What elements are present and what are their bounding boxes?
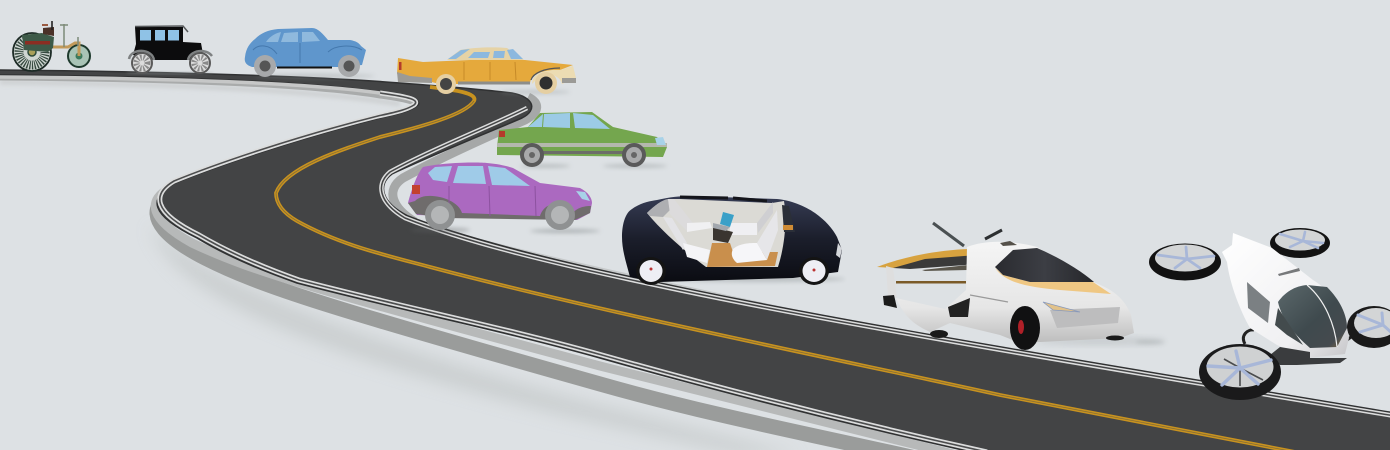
windows: [140, 30, 151, 40]
wheels: [254, 55, 276, 77]
cabin and body: [133, 27, 203, 60]
table: [713, 227, 733, 243]
shadow: [530, 229, 600, 233]
wheels: [436, 74, 456, 94]
car: 1880s motorwagen: [13, 21, 90, 71]
soft stripe on the far upper strip: [0, 77, 380, 93]
front light: [836, 243, 842, 258]
details: [412, 185, 420, 194]
chin: [1270, 347, 1347, 365]
rotor: right: [1347, 306, 1390, 348]
vehicle: passenger drone: [1135, 228, 1390, 400]
dark body shell: [622, 196, 842, 282]
wheels: [520, 143, 544, 167]
windows: [448, 49, 470, 59]
wing: [877, 249, 969, 268]
fenders: [129, 51, 154, 60]
car: green 1980s sedan: [497, 112, 667, 168]
arm struts: [1243, 330, 1358, 375]
cabin: [447, 47, 524, 60]
wheels: [425, 200, 455, 230]
orange stripe: [995, 268, 1111, 294]
car: blue 1940s sedan: [245, 28, 375, 78]
shadow: [255, 74, 375, 78]
windshield: [995, 248, 1094, 282]
cockpit frame: [1307, 285, 1337, 347]
headlight: [1043, 302, 1080, 312]
door jamb: [647, 199, 670, 217]
tail fin: [886, 266, 897, 298]
wooden floor: [707, 243, 778, 267]
shadow: [1035, 338, 1165, 344]
curb: light ledge along far side: [420, 224, 1390, 416]
door lines: [253, 43, 362, 63]
car: autonomous open-interior vehicle: [622, 196, 845, 285]
shadow: [126, 72, 214, 74]
shadow: [1135, 340, 1165, 344]
curb: inner right side: [393, 97, 537, 222]
yellow centre line: [276, 87, 1295, 450]
rotor blades: [933, 223, 964, 246]
curb: lower edge, dark side: [157, 160, 960, 450]
wheels: [1010, 306, 1040, 350]
frame: [50, 43, 79, 56]
wheels: [636, 257, 666, 285]
side vent: [948, 298, 970, 317]
car: purple hatchback: [408, 162, 600, 233]
cockpit glass: [1278, 285, 1347, 348]
laptop: [720, 212, 734, 227]
white edge line: inner double stripe: [381, 108, 1390, 416]
seat and tiller: [43, 27, 54, 36]
car: black vintage sedan: [126, 26, 214, 74]
windows: [266, 32, 281, 42]
roof rails: [680, 197, 767, 201]
shadow: [500, 90, 570, 94]
shadow: [675, 276, 845, 282]
windows: [428, 166, 452, 182]
lower trim: [408, 196, 591, 220]
curb: upper-left strip: [0, 78, 418, 122]
car: flying car with folded wings: [877, 223, 1165, 350]
side windows: [1247, 282, 1270, 323]
fuselage: [1222, 233, 1349, 358]
interior cutout: [647, 199, 785, 267]
white edge line: lower double stripe: [160, 93, 987, 450]
body: [497, 112, 667, 157]
rotor: front: [1199, 344, 1281, 400]
curb: lower edge, light top: [155, 121, 985, 450]
rear wheel: [13, 33, 51, 71]
front grille: [1050, 307, 1120, 328]
door mirror and accent: [782, 205, 795, 232]
windows: [528, 114, 543, 127]
roof vent: [1278, 268, 1300, 276]
roof pod: [1000, 241, 1017, 246]
rotor: left: [1149, 244, 1221, 280]
rear bumper and sill: [397, 72, 432, 83]
front wheel: [68, 45, 90, 67]
body: [408, 162, 592, 220]
road ground shadow: [150, 225, 800, 450]
body: [245, 28, 366, 67]
body: [896, 242, 1134, 343]
wheels: [132, 53, 152, 73]
door line: [970, 295, 1008, 302]
side trim: [497, 143, 667, 147]
rotor: far top: [1270, 228, 1330, 258]
seats: [668, 199, 693, 232]
front cream panel: [532, 66, 576, 84]
body: [397, 58, 573, 84]
shadow: [603, 164, 667, 168]
car: yellow 1950s finned sedan: [397, 47, 576, 94]
